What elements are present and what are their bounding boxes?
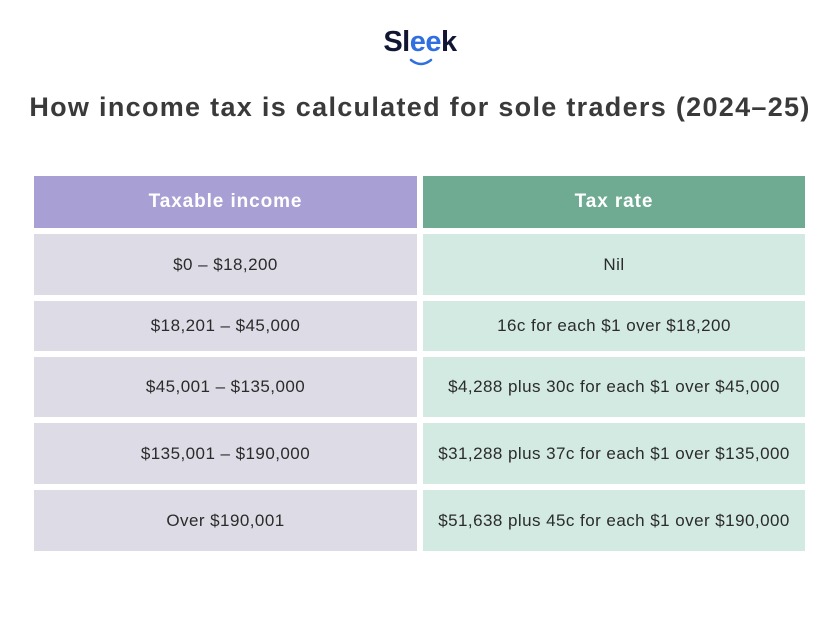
table: Nil [603,254,625,274]
row 5 [34,490,417,551]
table: $31,288 plus 37c for each $1 over $135,000 [438,444,790,462]
row 3: $45,001 – $135,000 [146,377,305,396]
table: 16c for each $1 over $18,200 [497,316,731,335]
row 1 [34,234,417,295]
table: $51,638 plus 45c for each $1 over $190,000 [438,510,790,530]
title: How income tax is calculated for sole traders (2024–25) [29,92,811,122]
row 4: $135,001 – $190,000 [141,444,310,462]
row 4 [34,423,417,484]
table: $4,288 plus 30c for each $1 over $45,000 [448,377,780,396]
header: taxable income: Taxable income [149,191,302,212]
row 5: Over $190,001 [166,510,285,530]
row 2 [34,301,417,351]
row 2: $18,201 – $45,000 [151,316,300,335]
logo: Sleek [383,26,457,58]
row 1: $0 – $18,200 [173,254,278,274]
header: tax rate [423,176,805,228]
header: taxable income [34,176,417,228]
header: tax rate: Tax rate [575,191,653,212]
row 3 [34,357,417,417]
